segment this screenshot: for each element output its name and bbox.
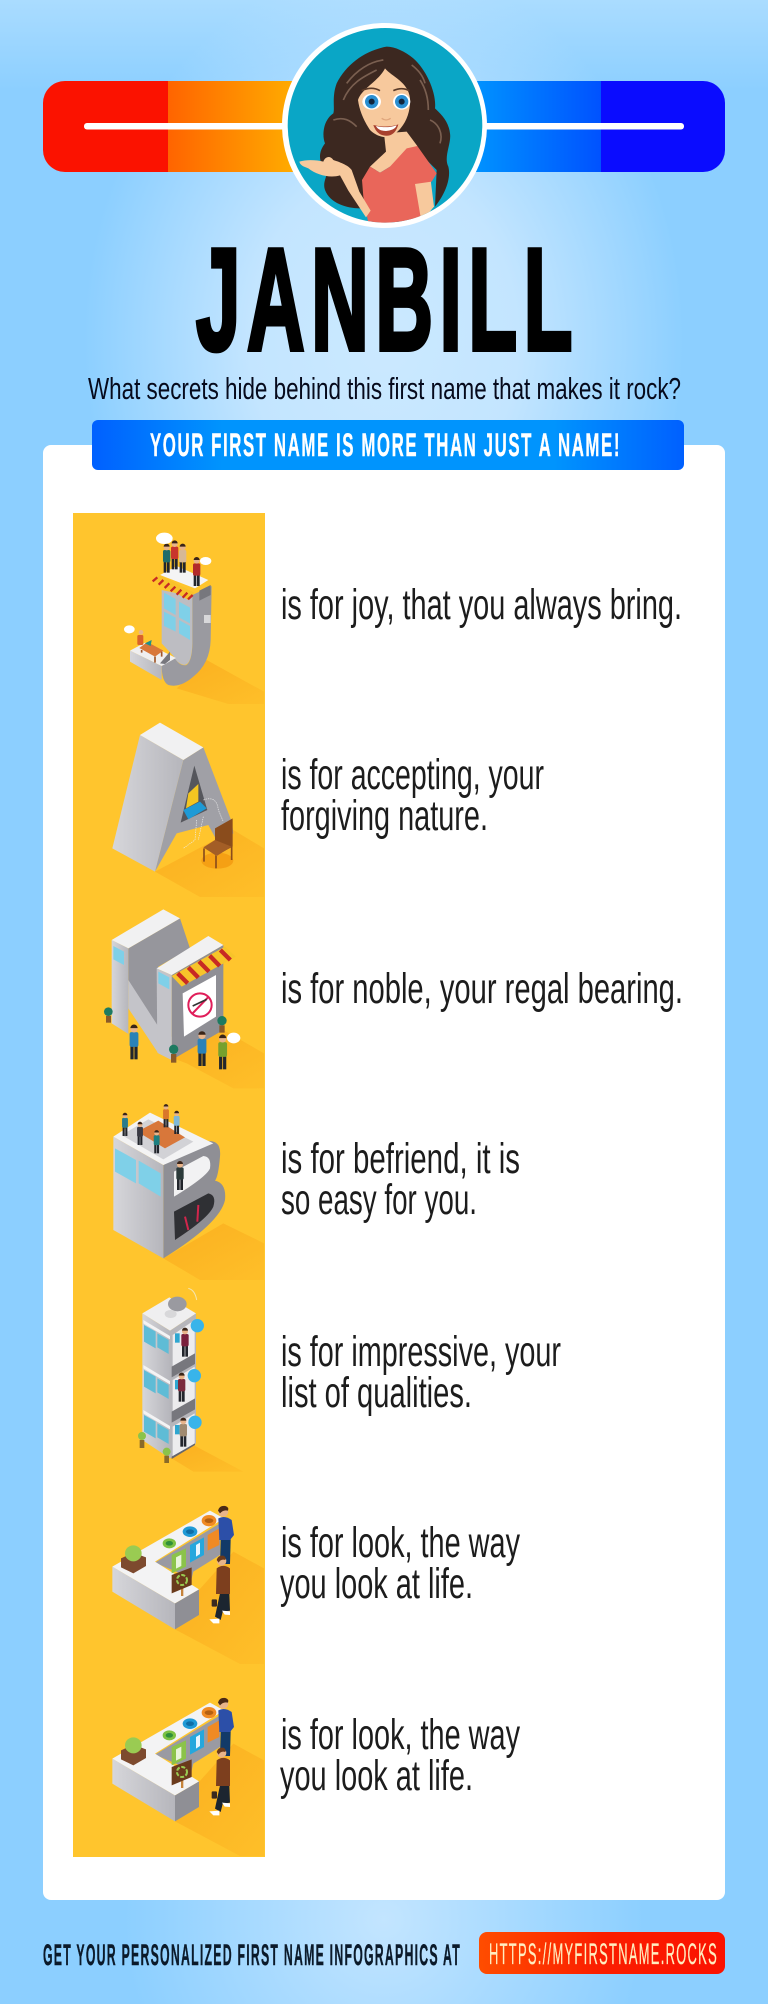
list text: B: so easy for you.	[281, 1176, 477, 1224]
icon: letter L	[112, 1506, 264, 1664]
icon: letter L (second)	[112, 1698, 264, 1856]
list text: L (second)	[280, 1711, 520, 1800]
icon: letter B	[113, 1104, 264, 1280]
footer url button	[479, 1932, 725, 1974]
header bar	[43, 81, 725, 172]
white content panel	[43, 445, 725, 1900]
yellow illustration strip	[73, 513, 265, 1857]
icon: letter A	[112, 723, 264, 897]
icon: letter N	[104, 909, 264, 1088]
list text: B: is for befriend, it is	[281, 1135, 520, 1183]
list text: B	[281, 1135, 520, 1224]
list text: L: is for look, the way	[281, 1519, 520, 1567]
list text: A: is for accepting, your	[281, 751, 544, 799]
avatar portrait	[282, 23, 487, 228]
list text: L (second): you look at life.	[280, 1752, 473, 1800]
icon: letter J	[124, 533, 264, 704]
banner	[92, 420, 684, 470]
list text: I: list of qualities.	[281, 1369, 472, 1417]
list text: L: you look at life.	[280, 1560, 473, 1608]
list text: L (second): is for look, the way	[281, 1711, 520, 1759]
list text: A	[281, 751, 544, 840]
list text: A: forgiving nature.	[281, 792, 488, 840]
list text: L	[280, 1519, 520, 1608]
icon: letter I	[138, 1288, 243, 1472]
list text: I: is for impressive, your	[281, 1328, 561, 1376]
list text: I	[281, 1328, 561, 1417]
